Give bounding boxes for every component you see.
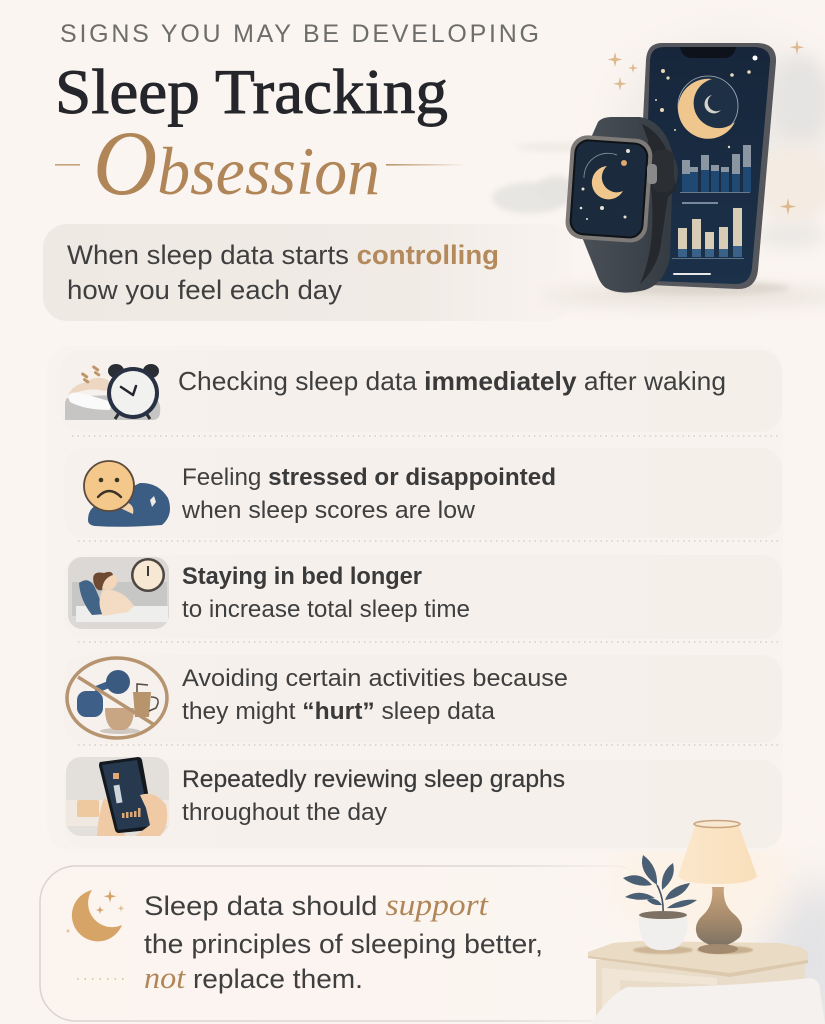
background clouds: top right <box>492 40 825 308</box>
icon: prohibited headphones and coffee <box>67 658 167 738</box>
potted plant <box>623 855 697 954</box>
phone stars <box>655 56 758 148</box>
row 4 <box>64 655 782 743</box>
text: row 3: to increase total sleep time <box>182 596 470 623</box>
text: row 2: Feeling stressed or disappointed <box>182 464 556 491</box>
icon: smartphone <box>610 43 790 295</box>
title: Obsession: Obsession <box>93 112 380 214</box>
row 5 <box>64 757 782 848</box>
text: row 5: Repeatedly reviewing sleep graphs <box>182 766 565 793</box>
text: row 3: Staying in bed longer <box>182 563 422 590</box>
panel: subtitle: When sleep data starts controlling <box>67 240 499 270</box>
icon: gold crescent moon with stars <box>66 890 124 979</box>
phone crescent moon <box>678 76 738 139</box>
text: row 5: throughout the day <box>182 799 387 826</box>
watch crescent moon <box>592 166 623 199</box>
lamp <box>678 820 757 954</box>
row 1 <box>60 350 782 432</box>
panel: subtitle: how you feel each day <box>67 275 343 305</box>
icon: sad face on blue body <box>84 461 170 527</box>
text: row 1: Checking sleep data immediately after waking <box>178 366 726 396</box>
text: closing message: not replace them. <box>144 960 363 995</box>
icon: alarm clock on pillow <box>65 364 160 420</box>
text: closing message: the principles of sleeping better, <box>144 929 543 959</box>
text: closing message: Sleep data should support <box>144 887 489 922</box>
text: row 2: when sleep scores are low <box>181 497 476 524</box>
gold sparkles <box>608 40 804 215</box>
phone upper bar chart <box>680 145 751 193</box>
panel: warning signs list <box>47 346 783 852</box>
text: row 4 <box>182 665 568 725</box>
icon: smartwatch <box>564 117 678 293</box>
text: row 3 <box>182 563 470 623</box>
row 3 <box>64 555 782 639</box>
title: Sleep Tracking: Sleep Tracking <box>55 57 448 127</box>
background glow: bottom right <box>610 820 825 1024</box>
text: row 4: Avoiding certain activities because <box>182 665 568 692</box>
panel: subtitle <box>43 224 573 321</box>
row 2 <box>64 448 782 538</box>
text: row 2 <box>181 464 556 524</box>
text: row 4: they might “hurt” sleep data <box>182 698 496 725</box>
text: closing message <box>144 887 543 995</box>
pillow <box>590 978 825 1024</box>
icon: person lying in bed <box>68 557 169 629</box>
phone lower bar chart <box>672 202 744 259</box>
illustration: bedside table <box>588 820 825 1024</box>
icon: hands holding phone with graphs <box>66 757 169 836</box>
panel: closing message <box>40 866 650 1021</box>
text: row 5 <box>182 766 565 826</box>
eyebrow heading: SIGNS YOU MAY BE DEVELOPING <box>60 20 539 48</box>
